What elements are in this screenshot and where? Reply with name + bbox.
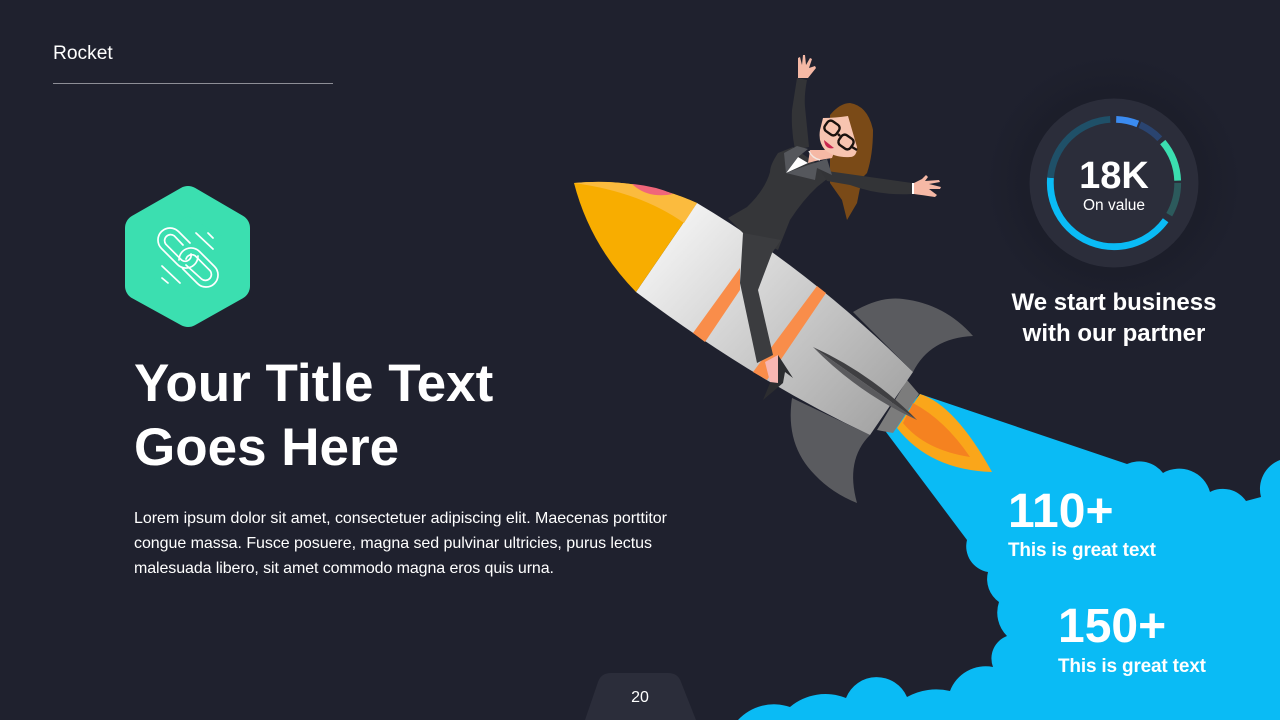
raised hand [798,55,816,78]
stat 110+ [1008,485,1156,561]
woman [728,55,941,400]
collar [784,146,808,173]
stat 150+ [1058,600,1206,677]
neck [808,150,835,163]
nose highlight [574,182,697,223]
leg [740,233,781,363]
shirt [786,157,808,173]
hair [830,103,873,220]
stat 150+: This is great text [1058,656,1206,677]
gauge caption [1012,289,1216,347]
outstretched arm [820,170,912,194]
header label: Rocket [53,43,113,64]
gauge caption: with our partner [1023,320,1205,347]
right hand [914,175,941,197]
title [134,354,493,476]
title: Goes Here [134,418,399,476]
raised arm [792,78,809,150]
body paragraph: congue massa. Fusce posuere, magna sed pulvinar ultricies, purus lectus [134,535,652,552]
nozzle [877,380,919,433]
lapel [786,159,832,180]
inner flame [903,403,970,457]
glasses [823,119,857,151]
torso [728,147,832,250]
page number: 20 [631,689,649,706]
mouth [824,140,834,148]
centre fin [813,347,917,420]
body paragraph [134,510,668,577]
cuff [912,183,914,194]
gauge label: On value [1083,197,1145,214]
necklace [809,151,820,160]
lower fin [791,398,870,503]
orange band 1 [693,268,740,342]
title rule [53,82,333,84]
stat 150+: 150+ [1058,600,1166,653]
body paragraph: malesuada libero, sit amet commodo magna eros quis urna. [134,560,554,577]
rocket [574,182,992,503]
page number tab [585,673,696,720]
gauge value: 18K [1079,155,1149,197]
gauge halo [986,55,1242,311]
exhaust beam and cloud [738,394,1280,720]
orange band 2 [753,286,826,380]
nose cone [574,182,697,292]
upper fin [853,299,973,372]
flame [897,394,992,472]
gauge caption: We start business [1012,289,1216,316]
face [820,116,857,157]
nose pink spot [632,184,673,195]
body paragraph: Lorem ipsum dolor sit amet, consectetuer adipiscing elit. Maecenas porttitor [134,510,668,527]
gauge [1030,98,1198,268]
icon: hexagon chain link [139,200,236,313]
stat 110+: 110+ [1008,485,1113,538]
stat 110+: This is great text [1008,540,1156,561]
foot and heel [763,355,793,400]
title: Your Title Text [134,354,493,413]
rocket body [636,203,913,435]
